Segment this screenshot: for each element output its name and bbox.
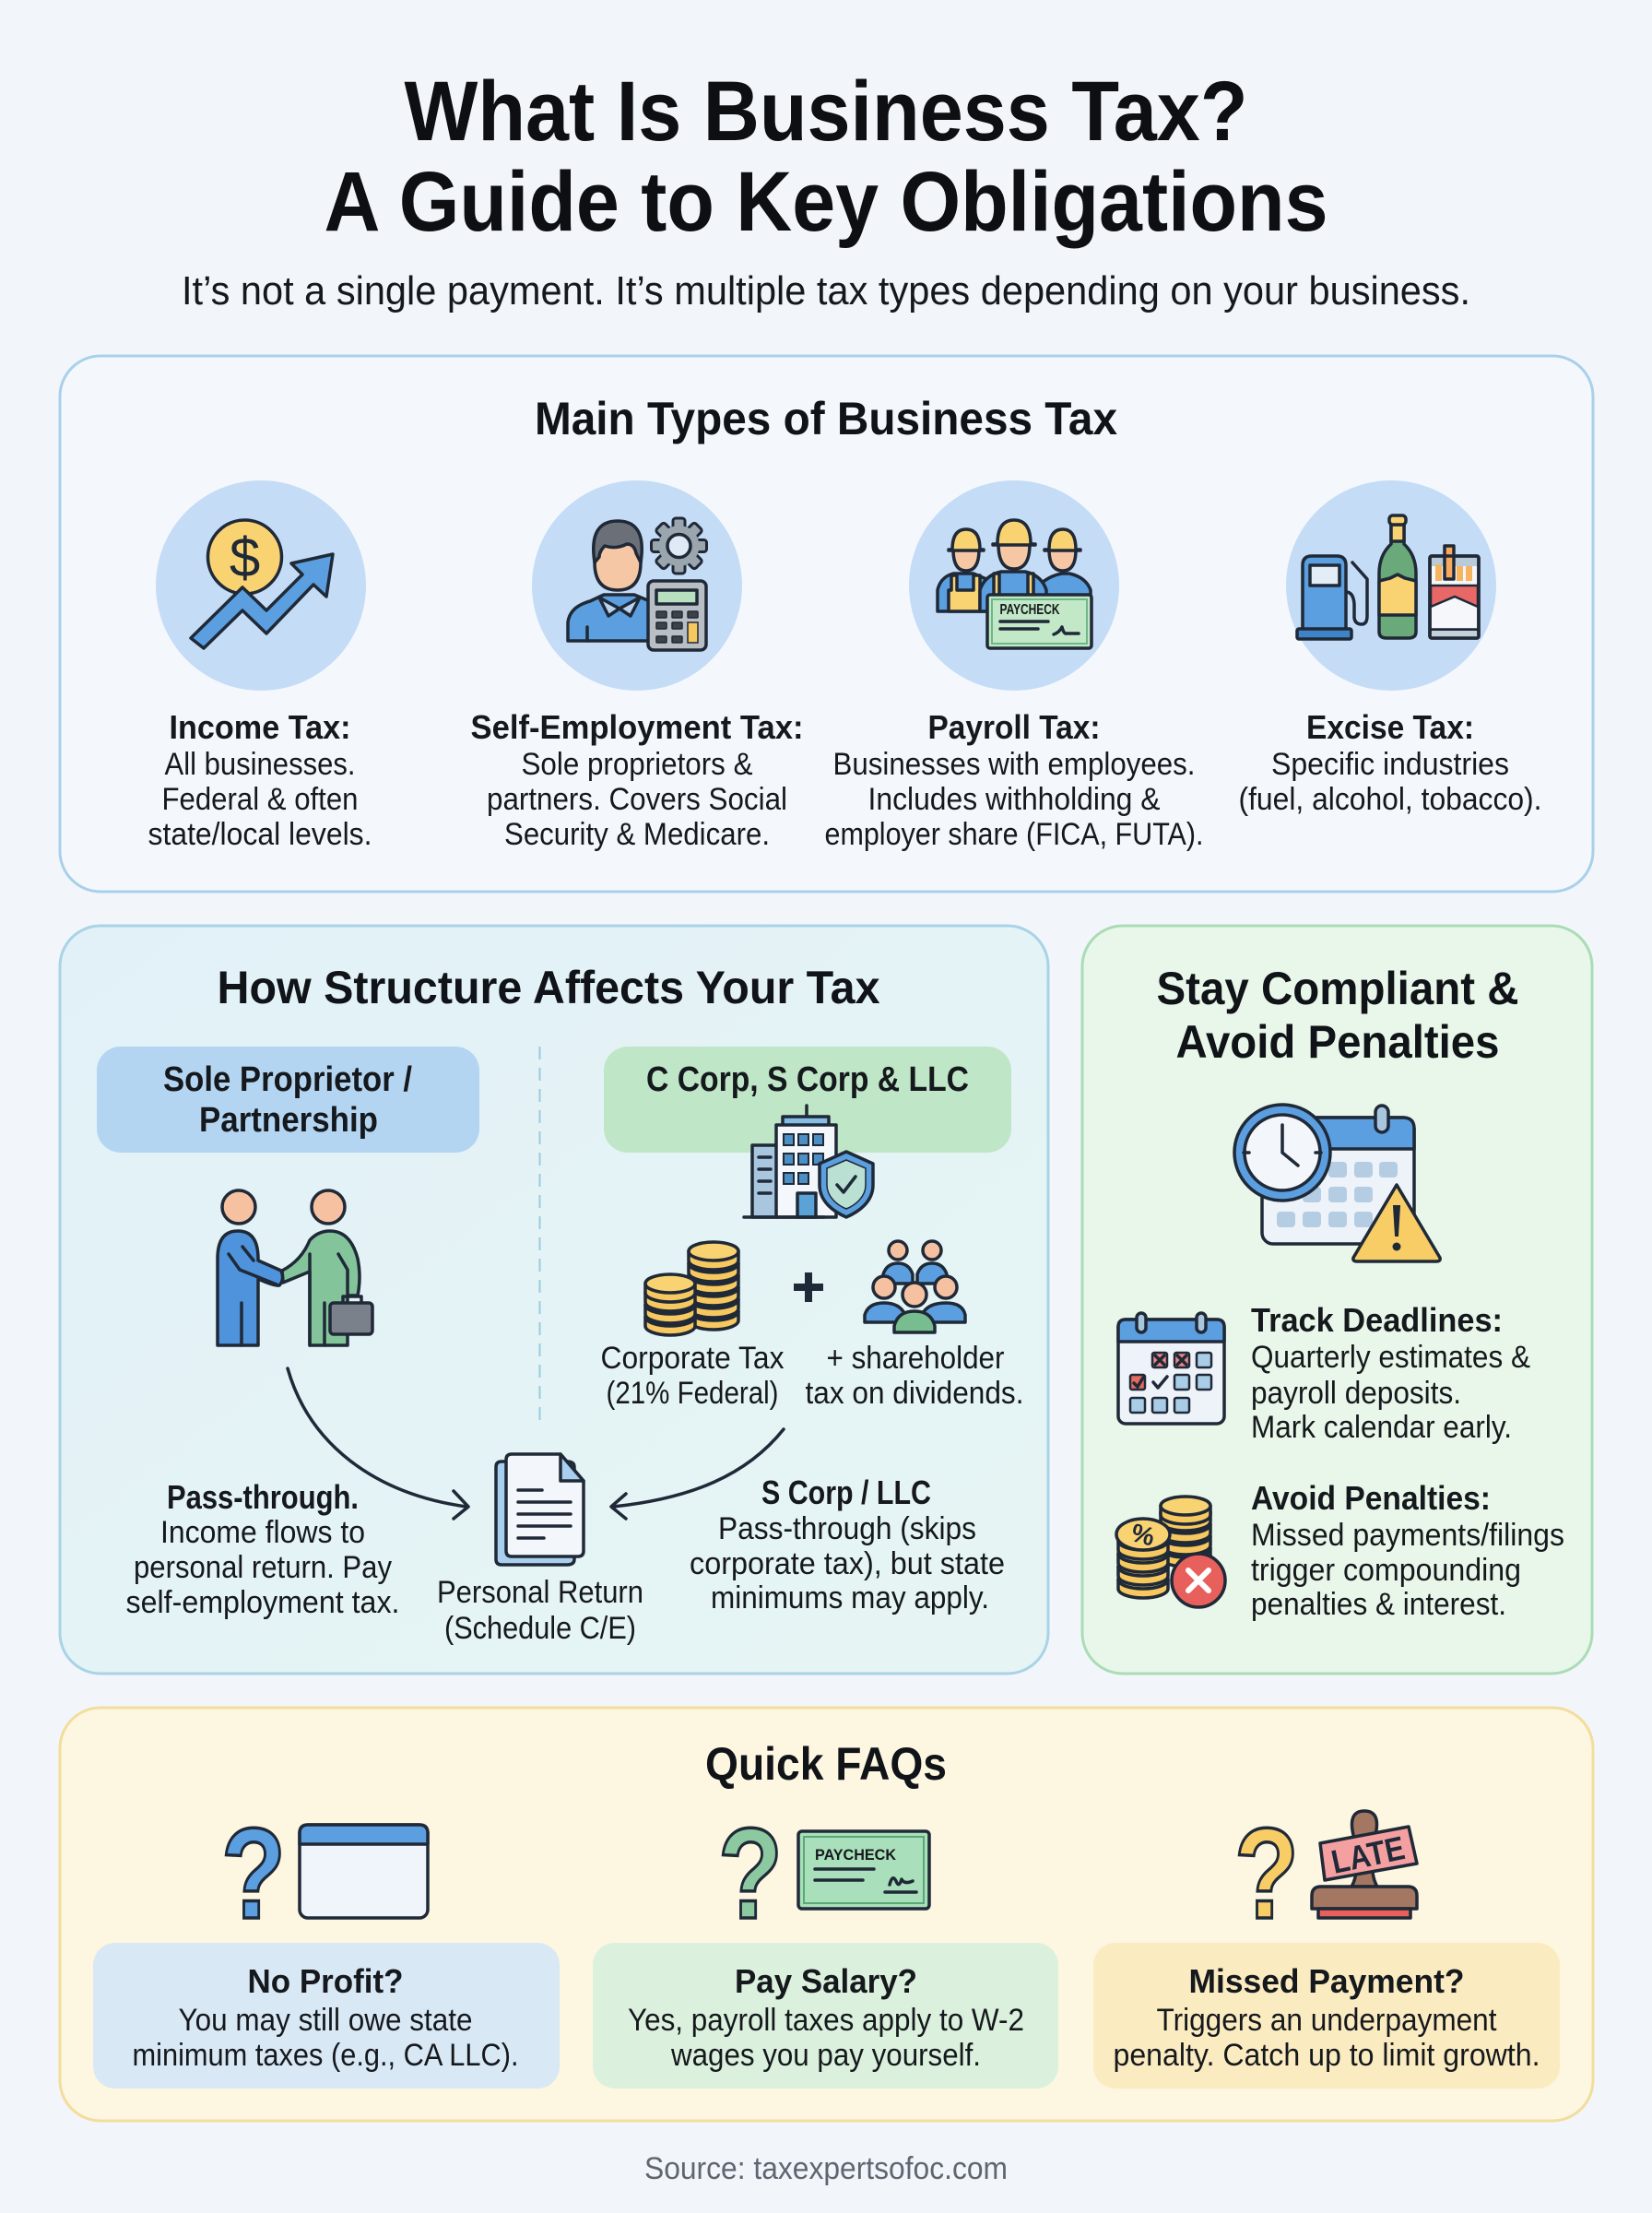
arrow: pass-through to personal return	[288, 1368, 468, 1519]
icon: yellow question mark and late stamp: LATE	[1328, 1828, 1408, 1881]
text: track deadlines: Track Deadlines:	[1251, 1301, 1503, 1339]
text: excise tax	[1239, 708, 1541, 817]
text: shareholder tax: tax on dividends.	[806, 1376, 1023, 1411]
heading: main types: Main Types of Business Tax	[535, 393, 1117, 444]
text: self-employment tax: Sole proprietors &	[522, 747, 753, 782]
text: track deadlines: Quarterly estimates &	[1251, 1340, 1530, 1375]
title: A Guide to Key Obligations	[324, 155, 1328, 249]
source line: Source: taxexpertsofoc.com	[644, 2151, 1008, 2186]
text: pass-through: Pass-through.	[167, 1478, 359, 1516]
card: missed payment: penalty. Catch up to limit growth.	[1114, 2038, 1540, 2073]
text: payroll tax: Payroll Tax:	[927, 708, 1101, 746]
text: pass-through: personal return. Pay	[134, 1550, 392, 1585]
text: s corp / llc: minimums may apply.	[711, 1580, 989, 1615]
icon: blue question mark and blank window: ?	[221, 1801, 286, 1946]
text: shareholder tax	[806, 1341, 1023, 1411]
text: track deadlines	[1251, 1301, 1530, 1445]
card: no profit: You may still owe state	[179, 2003, 472, 2038]
text: corporate tax: Corporate Tax	[601, 1341, 784, 1376]
text: income tax: state/local levels.	[148, 817, 372, 852]
card: pay salary: wages you pay yourself.	[670, 2038, 981, 2073]
icon: green question mark and paycheck: PAYCHECK	[815, 1846, 897, 1864]
card: pay salary	[593, 1943, 1058, 2089]
icon: green question mark and paycheck: ?	[718, 1801, 783, 1946]
heading: stay compliant: Stay Compliant &	[1156, 963, 1519, 1014]
card: missed payment: Triggers an underpayment	[1156, 2003, 1497, 2038]
card: missed payment	[1093, 1943, 1560, 2089]
card: pay salary: Pay Salary?	[735, 1962, 917, 2000]
text: avoid penalties: penalties & interest.	[1251, 1587, 1506, 1622]
title	[324, 65, 1328, 249]
panel: stay compliant and avoid penalties	[1082, 926, 1592, 1674]
text: payroll tax	[824, 708, 1204, 852]
text: avoid penalties: Avoid Penalties:	[1251, 1479, 1491, 1517]
icon: income coin and arrow: $	[230, 527, 260, 588]
text: income tax: Federal & often	[162, 782, 358, 817]
arrow: s corp to personal return	[611, 1429, 784, 1519]
icon: income coin and arrow	[191, 520, 333, 648]
icon: clock, calendar and warning	[1234, 1105, 1440, 1261]
text: s corp / llc: corporate tax), but state	[690, 1546, 1005, 1581]
heading: quick faqs: Quick FAQs	[705, 1738, 947, 1790]
text: self-employment tax: Security & Medicare.	[504, 817, 770, 852]
card: missed payment: Missed Payment?	[1189, 1962, 1464, 2000]
heading: stay compliant	[1156, 963, 1519, 1068]
icon: workers with paycheck	[938, 520, 1092, 648]
text: personal return label: (Schedule C/E)	[444, 1611, 636, 1646]
text: s corp / llc: Pass-through (skips	[718, 1511, 976, 1546]
text: avoid penalties	[1251, 1479, 1564, 1622]
icon: corporate building with shield	[744, 1106, 873, 1217]
text: avoid penalties: trigger compounding	[1251, 1553, 1521, 1588]
card: pay salary: Yes, payroll taxes apply to W-2	[628, 2003, 1024, 2038]
icon: yellow question mark and late stamp	[1234, 1801, 1417, 1946]
icon: handshake of two partners	[218, 1190, 372, 1345]
icon: fuel pump, bottle and cigarette pack	[1297, 515, 1479, 639]
panel: how structure affects your tax	[60, 926, 1048, 1674]
card: no profit: minimum taxes (e.g., CA LLC).	[133, 2038, 518, 2073]
text: payroll tax: Includes withholding &	[868, 782, 1161, 817]
icon: plus sign	[794, 1272, 823, 1302]
icon: small deadlines calendar	[1118, 1313, 1224, 1424]
text: personal return label	[437, 1575, 643, 1646]
text: excise tax: (fuel, alcohol, tobacco).	[1239, 782, 1541, 817]
icon: corporate tax coin stacks	[645, 1242, 738, 1335]
text: s corp / llc: S Corp / LLC	[761, 1473, 931, 1511]
text: avoid penalties: Missed payments/filings	[1251, 1518, 1564, 1553]
text: income tax	[148, 708, 372, 852]
icon: yellow question mark and late stamp: ?	[1234, 1801, 1299, 1946]
text: self-employment tax	[470, 708, 804, 852]
label box: sole proprietor / partnership	[97, 1047, 479, 1153]
text: track deadlines: payroll deposits.	[1251, 1376, 1461, 1411]
icon: self-employed person with calculator and gear	[568, 518, 706, 650]
icon: coins with percent and red cross: %	[1128, 1518, 1158, 1552]
icon: green question mark and paycheck	[718, 1801, 929, 1946]
text: excise tax: Specific industries	[1271, 747, 1509, 782]
text: corporate tax: (21% Federal)	[607, 1376, 778, 1411]
text: personal return label: Personal Return	[437, 1575, 643, 1610]
text: self-employment tax: Self-Employment Tax:	[470, 708, 804, 746]
subtitle: It’s not a single payment. It’s multiple tax types depending on your business.	[182, 268, 1470, 314]
card: no profit: No Profit?	[247, 1962, 404, 2000]
text: pass-through: Income flows to	[160, 1515, 365, 1550]
text: excise tax: Excise Tax:	[1306, 708, 1474, 746]
text: self-employment tax: partners. Covers Social	[487, 782, 787, 817]
text: pass-through: self-employment tax.	[125, 1585, 400, 1620]
label box: sole proprietor / partnership: Sole Proprietor /	[163, 1060, 412, 1099]
label box: c corp, s corp and llc	[604, 1047, 1011, 1153]
text: income tax: Income Tax:	[170, 708, 350, 746]
card: no profit	[93, 1943, 560, 2089]
text: track deadlines: Mark calendar early.	[1251, 1410, 1512, 1445]
icon: workers with paycheck: PAYCHECK	[999, 602, 1060, 618]
panel: quick faqs	[60, 1708, 1593, 2121]
label box: c corp, s corp and llc: C Corp, S Corp & LLC	[646, 1060, 969, 1099]
text: corporate tax	[601, 1341, 784, 1411]
label box: sole proprietor / partnership: Partnership	[199, 1101, 378, 1140]
icon circles	[156, 480, 1496, 691]
text: pass-through	[125, 1478, 400, 1620]
icon: shareholders group	[865, 1241, 965, 1332]
heading: structure: How Structure Affects Your Tax	[218, 962, 880, 1013]
panel: main types of business tax	[60, 356, 1593, 892]
text: s corp / llc	[690, 1473, 1005, 1615]
text: payroll tax: Businesses with employees.	[833, 747, 1195, 782]
icon: personal return document	[496, 1454, 584, 1565]
text: shareholder tax: + shareholder	[826, 1341, 1005, 1376]
title: What Is Business Tax?	[404, 65, 1248, 159]
text: payroll tax: employer share (FICA, FUTA).	[824, 817, 1204, 852]
icon: blue question mark and blank window	[221, 1801, 428, 1946]
text: income tax: All businesses.	[164, 747, 356, 782]
icon: coins with percent and red cross	[1116, 1497, 1225, 1607]
heading: stay compliant: Avoid Penalties	[1176, 1016, 1499, 1068]
